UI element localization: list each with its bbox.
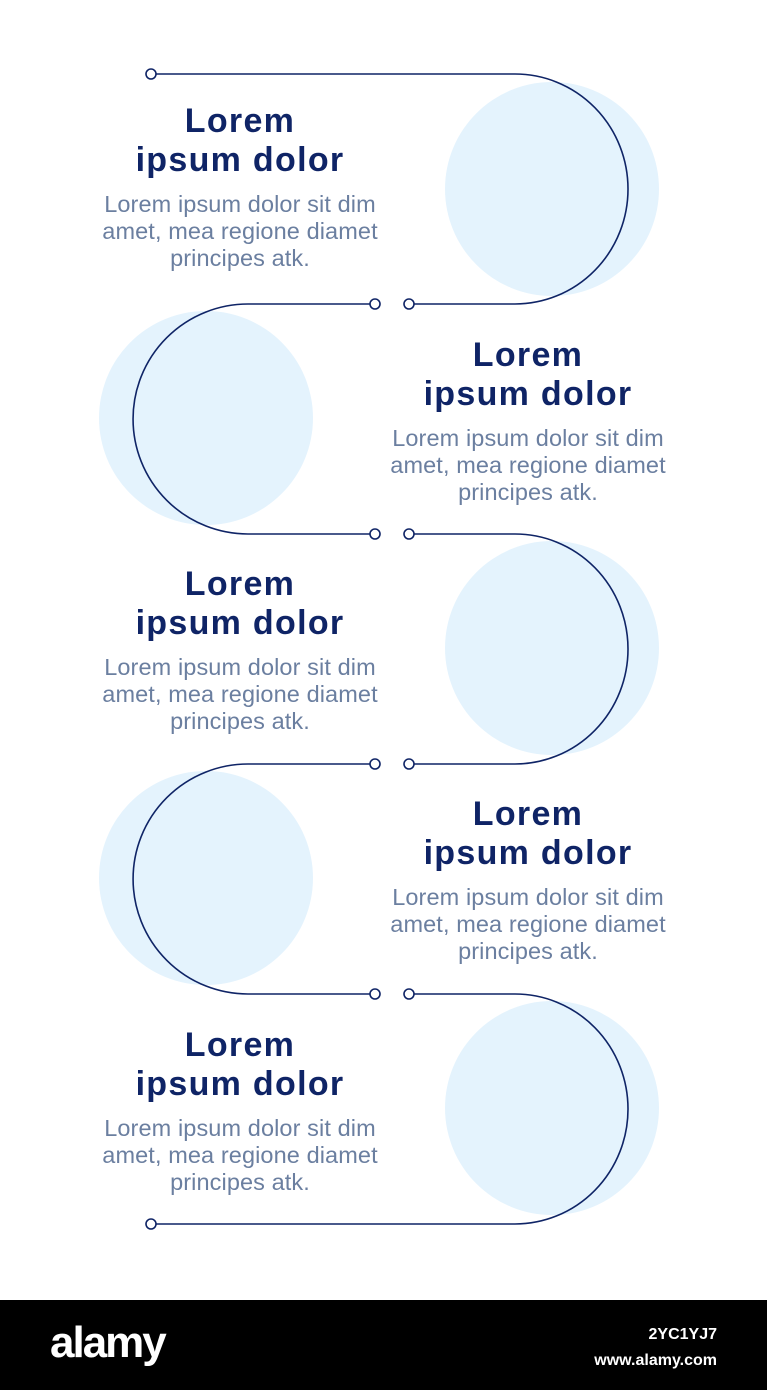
text block 2: Lorem	[473, 336, 583, 374]
circle: step 1	[445, 82, 659, 296]
text block 4: principes atk.	[458, 938, 598, 964]
text block 1: principes atk.	[170, 245, 310, 271]
text block 4: Lorem	[473, 795, 583, 833]
text block 4: ipsum dolor	[424, 834, 632, 872]
text block 3: Lorem	[185, 565, 295, 603]
text block 3: ipsum dolor	[136, 604, 344, 642]
footer id: www.alamy.com	[594, 1352, 717, 1369]
footer id: 2YC1YJ7	[648, 1326, 717, 1343]
text block 3: Lorem ipsum dolor sit dim	[104, 654, 376, 680]
endpoint dots	[146, 69, 414, 1229]
text block 5	[102, 1026, 378, 1195]
text block 5: amet, mea regione diamet	[102, 1142, 378, 1168]
circle: step 4	[99, 771, 313, 985]
text block 1: Lorem ipsum dolor sit dim	[104, 191, 376, 217]
circle: step 2	[99, 311, 313, 525]
text block 3: amet, mea regione diamet	[102, 681, 378, 707]
footer logo: alamy	[50, 1318, 165, 1367]
text block 1: ipsum dolor	[136, 141, 344, 179]
text block 4: Lorem ipsum dolor sit dim	[392, 884, 664, 910]
text block 1: amet, mea regione diamet	[102, 218, 378, 244]
text block 4	[390, 795, 666, 964]
text block 1: Lorem	[185, 102, 295, 140]
footer id	[594, 1326, 717, 1369]
text block 5: ipsum dolor	[136, 1065, 344, 1103]
text block 2: ipsum dolor	[424, 375, 632, 413]
text block 1	[102, 102, 378, 271]
text block 3	[102, 565, 378, 734]
circle: step 5	[445, 1001, 659, 1215]
text block 5: Lorem ipsum dolor sit dim	[104, 1115, 376, 1141]
connector lines	[133, 74, 628, 1224]
text block 5: Lorem	[185, 1026, 295, 1064]
text block 2: principes atk.	[458, 479, 598, 505]
text block 2: amet, mea regione diamet	[390, 452, 666, 478]
text block 4: amet, mea regione diamet	[390, 911, 666, 937]
text block 3: principes atk.	[170, 708, 310, 734]
text block 2	[390, 336, 666, 505]
text block 2: Lorem ipsum dolor sit dim	[392, 425, 664, 451]
circle: step 3	[445, 541, 659, 755]
text block 5: principes atk.	[170, 1169, 310, 1195]
footer bar	[0, 1300, 767, 1390]
